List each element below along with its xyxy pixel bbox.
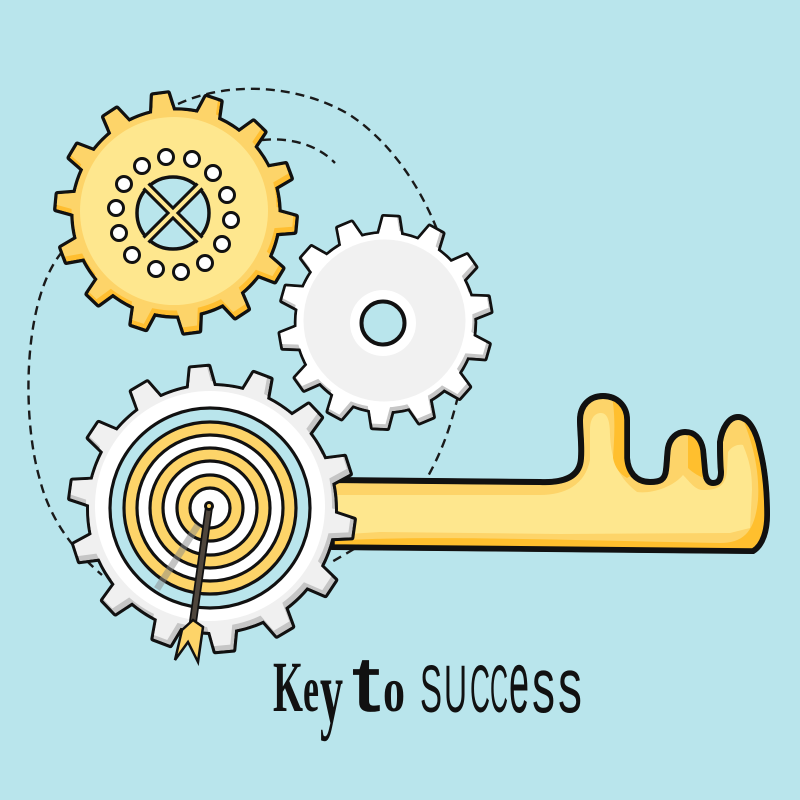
title xyxy=(273,632,582,743)
arrow fletching xyxy=(175,620,203,662)
ring of holes xyxy=(108,150,238,280)
title: s xyxy=(558,641,582,729)
key shading: first tooth edge xyxy=(612,400,630,478)
title: e xyxy=(303,653,319,726)
dashed orbit lines xyxy=(28,89,458,575)
title: C xyxy=(470,652,490,727)
target gear xyxy=(66,361,355,652)
centre hole xyxy=(350,290,416,356)
title: o xyxy=(383,654,405,725)
key shading: light inner xyxy=(332,413,752,535)
title: s xyxy=(532,641,555,729)
title: K xyxy=(273,647,303,727)
arrow xyxy=(175,501,214,662)
title: e xyxy=(509,632,529,731)
title: t xyxy=(352,640,380,728)
title: U xyxy=(444,652,467,727)
yellow gear xyxy=(54,88,296,333)
white gear xyxy=(278,213,491,428)
key xyxy=(330,395,775,560)
title: y xyxy=(320,643,343,743)
hub with cross xyxy=(137,177,209,249)
arrow shadow xyxy=(157,525,198,589)
target rings xyxy=(110,408,310,608)
key shading: orange edge xyxy=(334,422,764,548)
title: S xyxy=(420,652,442,727)
key shading: second tooth edge xyxy=(688,435,704,478)
title: C xyxy=(490,652,508,727)
